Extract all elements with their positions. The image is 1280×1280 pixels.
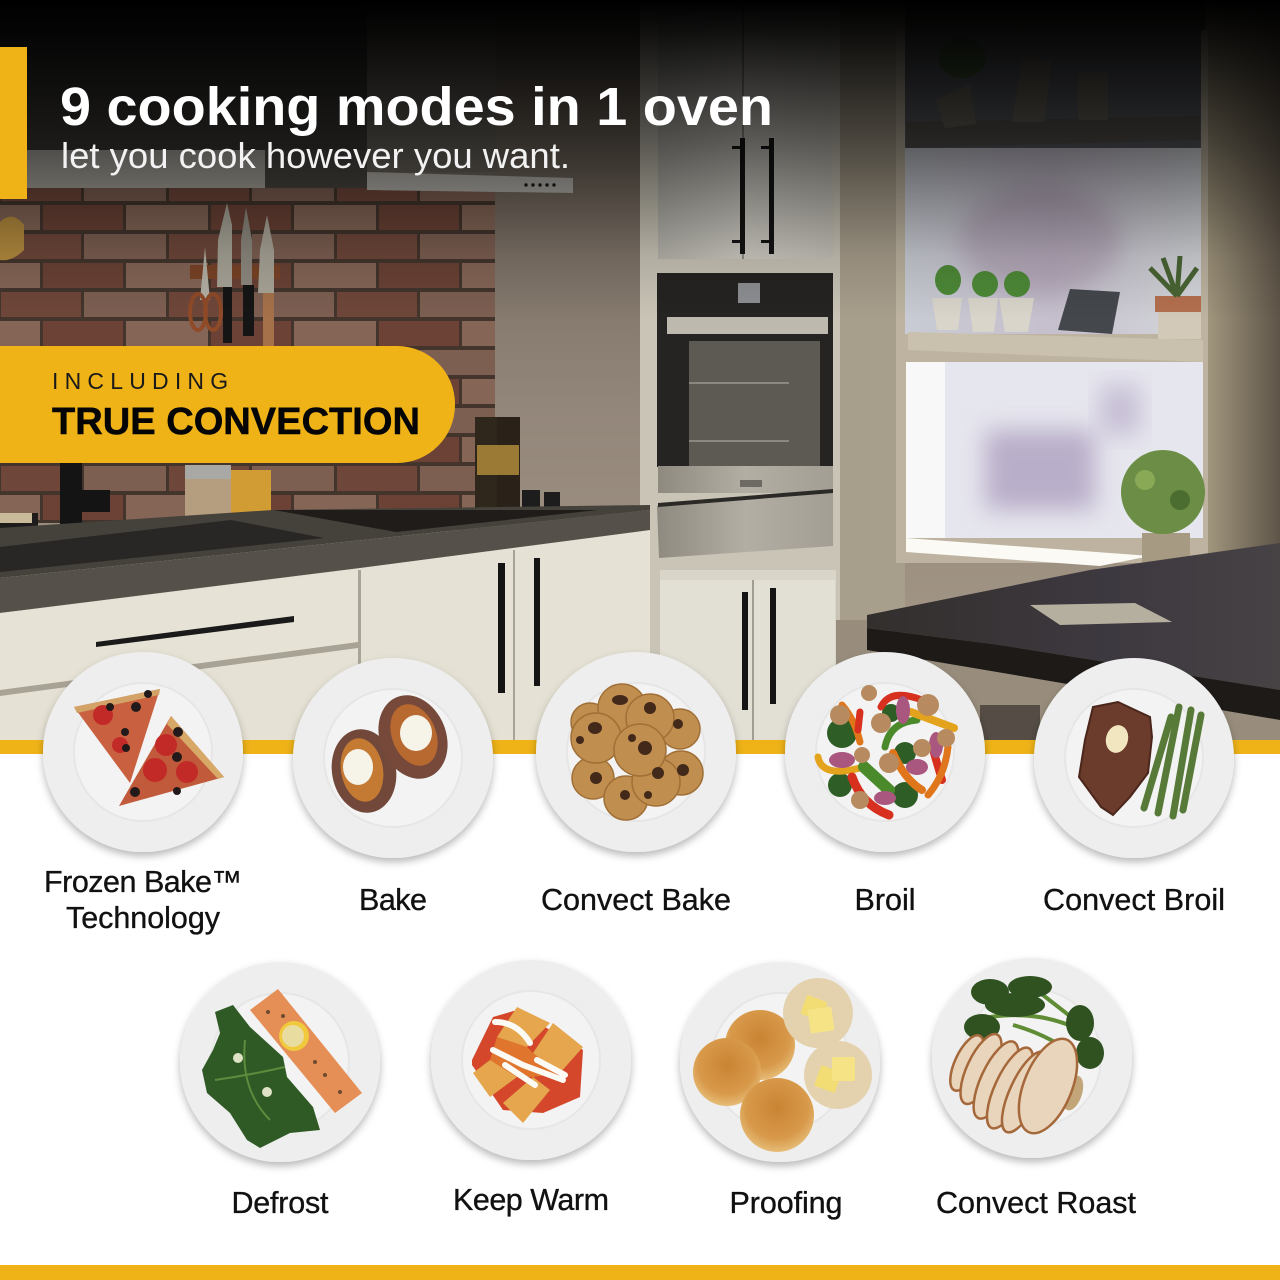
yellow title tab — [0, 47, 27, 199]
left counter and cabinets — [0, 505, 650, 745]
drawer handle — [96, 616, 294, 647]
label: frozen bake technology — [44, 865, 242, 935]
plate: convect roast turkey and broccoli — [932, 958, 1132, 1158]
knives on rack — [190, 203, 280, 346]
label: convect broil: Convect Broil — [1043, 883, 1225, 917]
door handles — [498, 558, 540, 693]
plate: keep warm enchiladas — [431, 960, 631, 1160]
upper cabinet — [658, 0, 833, 259]
label: broil: Broil — [854, 883, 916, 917]
title: 9 cooking modes in 1 oven — [60, 77, 773, 137]
herbs — [935, 265, 1030, 297]
top shelf — [906, 116, 1200, 148]
brick backsplash — [0, 188, 495, 523]
window with shelves — [896, 30, 1208, 567]
callout: including true convection: TRUE CONVECTION — [52, 401, 420, 443]
range hood — [0, 0, 573, 193]
drawer gap — [0, 642, 358, 696]
label: proofing: Proofing — [730, 1186, 842, 1220]
white lower panel — [0, 754, 1280, 1265]
lower oven cabinet — [660, 570, 836, 745]
plate: proofing rolls — [680, 962, 880, 1162]
plate: bake potatoes — [293, 658, 493, 858]
kitchen background photo scene — [0, 0, 1280, 745]
label: convect bake: Convect Bake — [541, 883, 731, 917]
label: keep warm: Keep Warm — [453, 1183, 609, 1217]
yellow band — [0, 740, 1280, 754]
upper shelf decor — [936, 38, 1108, 128]
mug — [0, 217, 24, 260]
label: frozen bake technology: Frozen Bake™ — [44, 865, 242, 899]
callout: including true convection — [0, 346, 455, 463]
label: frozen bake technology: Technology — [66, 901, 221, 935]
wall oven — [657, 273, 833, 558]
herb pots — [932, 298, 1034, 332]
bottom yellow band — [0, 1265, 1280, 1280]
label: bake: Bake — [359, 883, 427, 917]
lower shelf — [908, 332, 1203, 362]
island counter — [836, 543, 1280, 745]
plate: convect bake cookies — [536, 652, 736, 852]
subtitle: let you cook however you want. — [61, 135, 570, 176]
door seams — [358, 550, 515, 745]
succulent — [1150, 256, 1201, 339]
callout: including true convection: INCLUDING — [52, 368, 234, 394]
label: defrost: Defrost — [232, 1186, 329, 1220]
plate: broil vegetables — [785, 652, 985, 852]
plate: frozen bake pizza — [43, 652, 243, 852]
drawer front — [0, 572, 358, 690]
spice mills, jars and faucet — [0, 417, 560, 537]
potted plant — [1121, 450, 1205, 567]
plate: defrost salmon and arugula — [180, 962, 380, 1162]
plate: convect broil steak and asparagus — [1034, 658, 1234, 858]
label: convect roast: Convect Roast — [936, 1186, 1137, 1220]
tablet — [1058, 289, 1120, 334]
top dark overlay — [0, 0, 1280, 320]
